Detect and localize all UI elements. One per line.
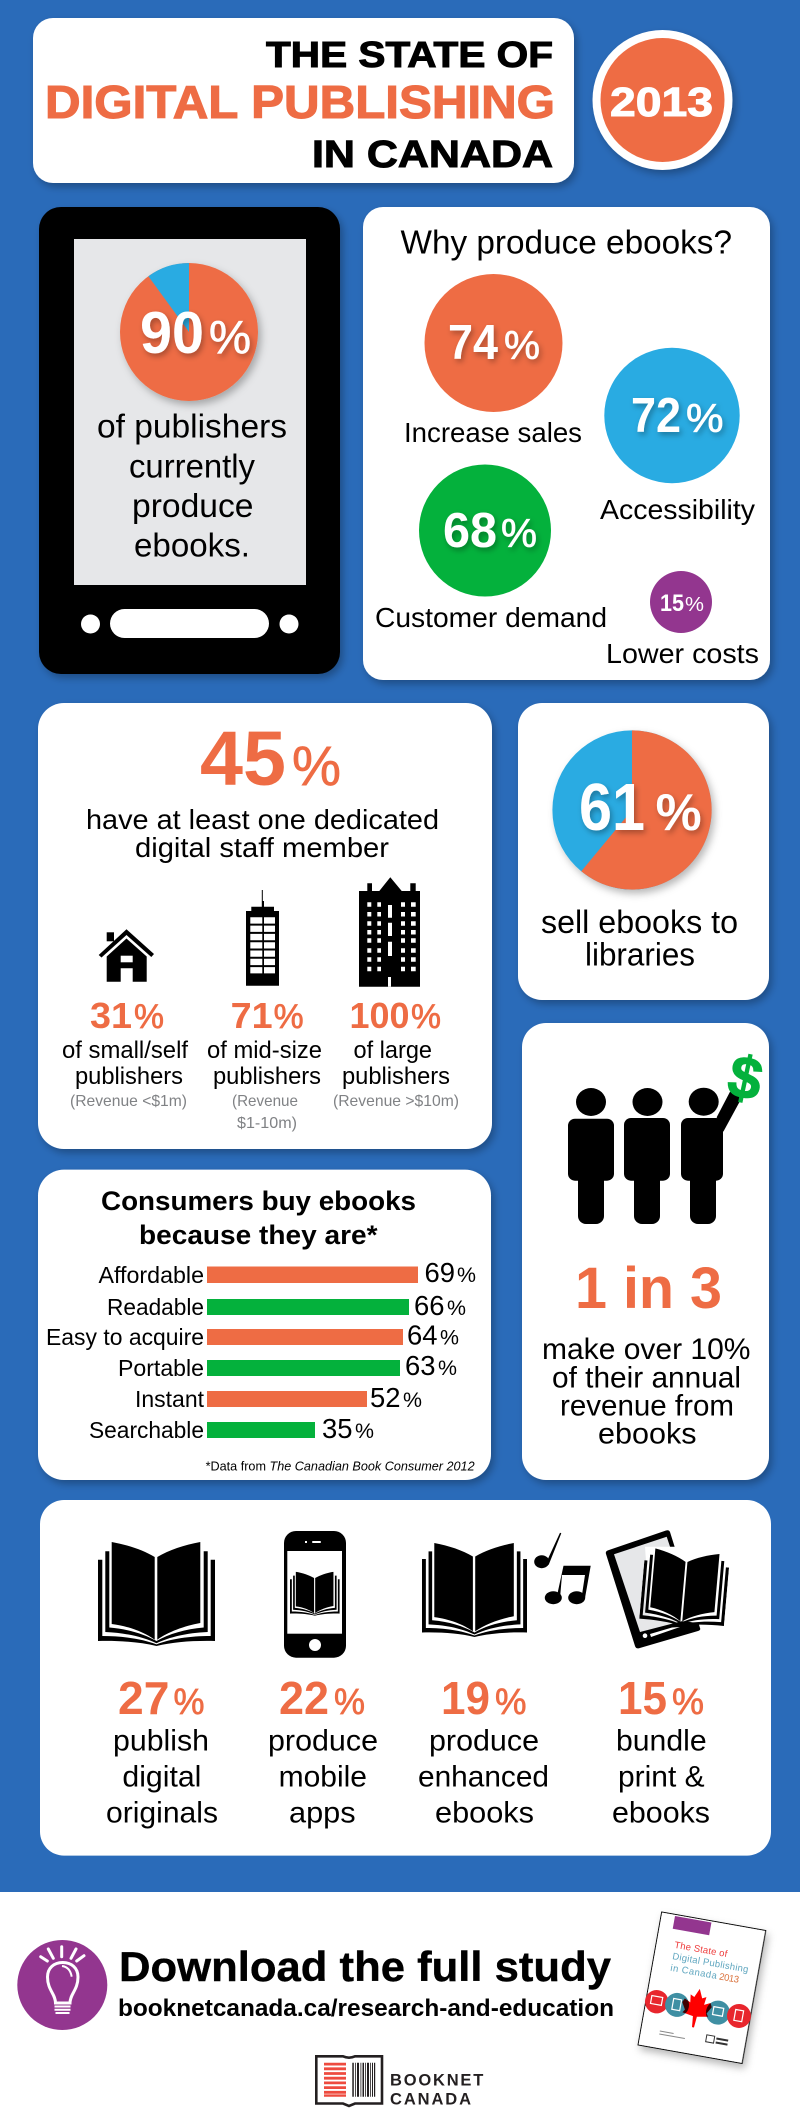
heading — [101, 1186, 416, 1250]
pie chart: 61 percent: % — [656, 784, 702, 842]
text: bundle print and ebooks — [612, 1725, 710, 1830]
pie chart: 61 percent — [552, 730, 712, 890]
stat: large publishers 100 percent: of large — [354, 1037, 432, 1064]
panel: consumers buy ebooks — [38, 1170, 491, 1480]
title panel: IN CANADA — [312, 134, 553, 176]
stat: mid-size publishers 71 percent: (Revenue — [232, 1093, 298, 1110]
bubble: accessibility 72 percent: % — [686, 397, 724, 441]
panel: dedicated digital staff — [38, 703, 492, 1149]
panel: why produce ebooks: Why produce ebooks? — [400, 224, 732, 260]
pie chart: 90 percent: 90 — [140, 300, 204, 366]
bubble: increase sales 74 percent: 74 — [448, 316, 498, 370]
text: sell ebooks to libraries: libraries — [585, 936, 695, 972]
icon: three people with dollar sign: $ — [722, 1042, 768, 1114]
panel: sell ebooks to libraries — [518, 703, 769, 1000]
text: have at least one dedicated digital staff member: have at least one dedicated — [86, 804, 439, 835]
text: publish digital originals: publish — [113, 1725, 209, 1758]
bar chart: Readable — [107, 1294, 204, 1320]
text: publish digital originals: originals — [106, 1797, 218, 1830]
column: publish digital originals — [98, 1542, 218, 1830]
bubble: lower costs 15 percent: 15 — [660, 590, 684, 617]
text: produce mobile apps: produce — [268, 1725, 378, 1758]
icon: three people with dollar sign — [568, 1042, 768, 1224]
text: make over 10 percent of their annual revenue from ebooks: of their annual — [552, 1362, 741, 1394]
stat: 19 percent: % — [495, 1681, 526, 1722]
stat: mid-size publishers 71 percent: 71 — [231, 995, 273, 1036]
stat: mid-size publishers 71 percent — [207, 995, 322, 1132]
bubble: accessibility 72 percent: Accessibility — [600, 494, 755, 525]
stat: 22 percent: 22 — [279, 1672, 329, 1724]
report cover thumbnail: in Canada — [670, 1963, 718, 1982]
bar chart: Easy to acquire — [46, 1324, 204, 1350]
logo: booknet canada: CANADA — [390, 2090, 471, 2108]
headline stat: 45 percent: % — [292, 734, 341, 797]
text: produce enhanced ebooks: ebooks — [435, 1797, 534, 1830]
title panel — [33, 18, 574, 183]
headline stat: 45 percent — [200, 716, 341, 802]
bar chart: 69 — [424, 1257, 455, 1288]
icon: mid-size office building — [246, 890, 279, 986]
heading: Consumers buy ebooks — [101, 1186, 416, 1216]
headline stat: 45 percent: 45 — [200, 716, 286, 802]
stat: mid-size publishers 71 percent: $1-10m) — [237, 1115, 297, 1132]
text: make over 10 percent of their annual revenue from ebooks — [542, 1333, 750, 1451]
icon: open book with music notes — [422, 1533, 591, 1637]
text: sell ebooks to libraries: sell ebooks to — [541, 904, 738, 940]
panel: why produce ebooks — [363, 207, 770, 680]
stat: 15 percent — [618, 1672, 704, 1724]
text: make over 10 percent of their annual revenue from ebooks: make over 10% — [542, 1333, 750, 1366]
stat: mid-size publishers 71 percent: of mid-size — [207, 1037, 322, 1064]
bar chart — [46, 1257, 476, 1444]
bar chart: % — [355, 1419, 374, 1443]
stat: small and self publishers 31 percent: publishers — [75, 1063, 183, 1090]
text: make over 10 percent of their annual revenue from ebooks: ebooks — [598, 1418, 696, 1451]
icon: large office building — [359, 877, 420, 987]
text: have at least one dedicated digital staff member — [86, 804, 439, 863]
icon: house — [99, 929, 154, 982]
text: bundle print and ebooks: bundle — [616, 1725, 707, 1758]
panel: 1 in 3 revenue — [522, 1023, 769, 1480]
report cover thumbnail: Digital Publishing — [671, 1951, 749, 1975]
text: produce enhanced ebooks: enhanced — [418, 1761, 549, 1794]
text: publish digital originals: digital — [122, 1761, 201, 1794]
column: bundle print and ebooks — [606, 1530, 732, 1830]
stat: 19 percent — [441, 1672, 526, 1724]
text: sell ebooks to libraries — [541, 904, 738, 972]
stat: small and self publishers 31 percent: 31 — [90, 995, 132, 1036]
text: produce mobile apps — [268, 1725, 378, 1830]
stat: 22 percent — [279, 1672, 365, 1724]
heading: because they are* — [139, 1220, 378, 1250]
text: of publishers currently produce ebooks: ebooks. — [134, 527, 250, 564]
heading: download the full study: booknetcanada.ca/research-and-education — [118, 1995, 614, 2022]
stat: mid-size publishers 71 percent: % — [274, 998, 304, 1036]
report cover thumbnail: The State of — [674, 1940, 728, 1960]
stat: large publishers 100 percent: publishers — [342, 1063, 450, 1090]
bar chart: % — [438, 1356, 457, 1380]
stat: 27 percent — [118, 1672, 204, 1724]
bar chart: 66 — [414, 1290, 444, 1321]
title panel: DIGITAL PUBLISHING — [45, 76, 555, 128]
text: of publishers currently produce ebooks: currently — [129, 448, 255, 484]
bar chart: % — [457, 1263, 476, 1287]
stat: 22 percent: % — [334, 1681, 365, 1722]
text: bundle print and ebooks: ebooks — [612, 1797, 710, 1830]
logo mark: book with barcode — [316, 2056, 382, 2106]
bar chart: 35 — [322, 1413, 352, 1444]
icon: light bulb — [17, 1940, 107, 2030]
text: of publishers currently produce ebooks — [97, 408, 287, 564]
footnote: *Data from The Canadian Book Consumer 2012 — [206, 1460, 475, 1474]
text: have at least one dedicated digital staff member: digital staff member — [135, 832, 389, 863]
report cover thumbnail: 2013 — [718, 1971, 740, 1986]
bar chart: 52 — [370, 1382, 400, 1413]
bubble: customer demand 68 percent: Customer demand — [375, 602, 607, 633]
bar chart: 63 — [405, 1350, 436, 1381]
bar chart: % — [440, 1326, 459, 1350]
stat: large publishers 100 percent: (Revenue >$10m) — [333, 1093, 459, 1110]
bar chart: Instant — [135, 1386, 205, 1412]
bubble: lower costs 15 percent: Lower costs — [606, 638, 759, 669]
stat: large publishers 100 percent: % — [411, 998, 441, 1036]
stat: small and self publishers 31 percent — [62, 995, 188, 1110]
heading: download the full study: Download the full study — [119, 1943, 612, 1990]
title panel: THE STATE OF — [266, 34, 553, 75]
text: produce enhanced ebooks — [418, 1725, 549, 1830]
pie chart: 90 percent — [120, 263, 258, 401]
icon: smartphone with book — [284, 1531, 346, 1658]
text: produce enhanced ebooks: produce — [429, 1725, 539, 1758]
logo: booknet canada: BOOKNET — [390, 2072, 483, 2090]
column: produce mobile apps — [268, 1531, 378, 1830]
logo: booknet canada — [316, 2056, 483, 2108]
text: of publishers currently produce ebooks: of publishers — [97, 408, 287, 444]
icon: tablet with book — [606, 1530, 732, 1648]
icon: open book — [98, 1542, 215, 1646]
column: produce enhanced ebooks — [418, 1533, 591, 1830]
heading: download the full study — [118, 1943, 614, 2022]
report cover thumbnail — [637, 1912, 766, 2064]
bubble: lower costs 15 percent — [606, 571, 759, 669]
bubble: increase sales 74 percent: % — [504, 324, 540, 368]
year badge — [592, 30, 732, 170]
ereader buttons — [81, 609, 298, 638]
year badge: 2013 — [610, 79, 713, 125]
bubble: customer demand 68 percent: % — [501, 512, 537, 556]
pie chart: 61 percent: 61 — [579, 770, 645, 845]
stat: large publishers 100 percent — [333, 995, 459, 1110]
panel: digital products — [40, 1500, 771, 1856]
bar chart: Affordable — [98, 1262, 204, 1288]
bubble: customer demand 68 percent — [375, 464, 607, 633]
bubble: increase sales 74 percent — [404, 274, 582, 448]
bar chart: Portable — [118, 1355, 204, 1381]
stat: 19 percent: 19 — [441, 1672, 490, 1724]
stat: small and self publishers 31 percent: (Revenue <$1m) — [70, 1093, 187, 1110]
bubble: customer demand 68 percent: 68 — [443, 504, 497, 558]
text: of publishers currently produce ebooks: produce — [132, 487, 254, 524]
stat: small and self publishers 31 percent: of small/self — [62, 1037, 188, 1064]
stat: 15 percent: 15 — [618, 1672, 667, 1724]
pie chart: 90 percent: % — [209, 311, 251, 363]
bar chart: % — [403, 1388, 422, 1412]
text: make over 10 percent of their annual revenue from ebooks: revenue from — [560, 1390, 734, 1422]
stat: large publishers 100 percent: 100 — [350, 995, 410, 1036]
text: bundle print and ebooks: print & — [618, 1761, 705, 1794]
stat: 27 percent: % — [174, 1681, 204, 1722]
bar chart: 64 — [407, 1320, 438, 1351]
stat: mid-size publishers 71 percent: publishers — [213, 1063, 321, 1090]
panel: ereader 90 percent — [39, 207, 340, 674]
bubble: increase sales 74 percent: Increase sales — [404, 417, 582, 448]
text: produce mobile apps: apps — [289, 1797, 356, 1830]
stat: small and self publishers 31 percent: % — [134, 998, 164, 1036]
bar chart: % — [447, 1296, 466, 1320]
bubble: lower costs 15 percent: % — [685, 594, 704, 616]
bubble: accessibility 72 percent: 72 — [631, 389, 681, 443]
text: produce mobile apps: mobile — [279, 1761, 367, 1794]
text: publish digital originals — [106, 1725, 218, 1830]
stat: 27 percent: 27 — [118, 1672, 169, 1724]
bar chart: Searchable — [89, 1417, 204, 1443]
stat: 15 percent: % — [672, 1681, 704, 1722]
headline stat: 1 in 3: 1 in 3 — [575, 1256, 722, 1321]
bubble: accessibility 72 percent — [600, 348, 755, 525]
